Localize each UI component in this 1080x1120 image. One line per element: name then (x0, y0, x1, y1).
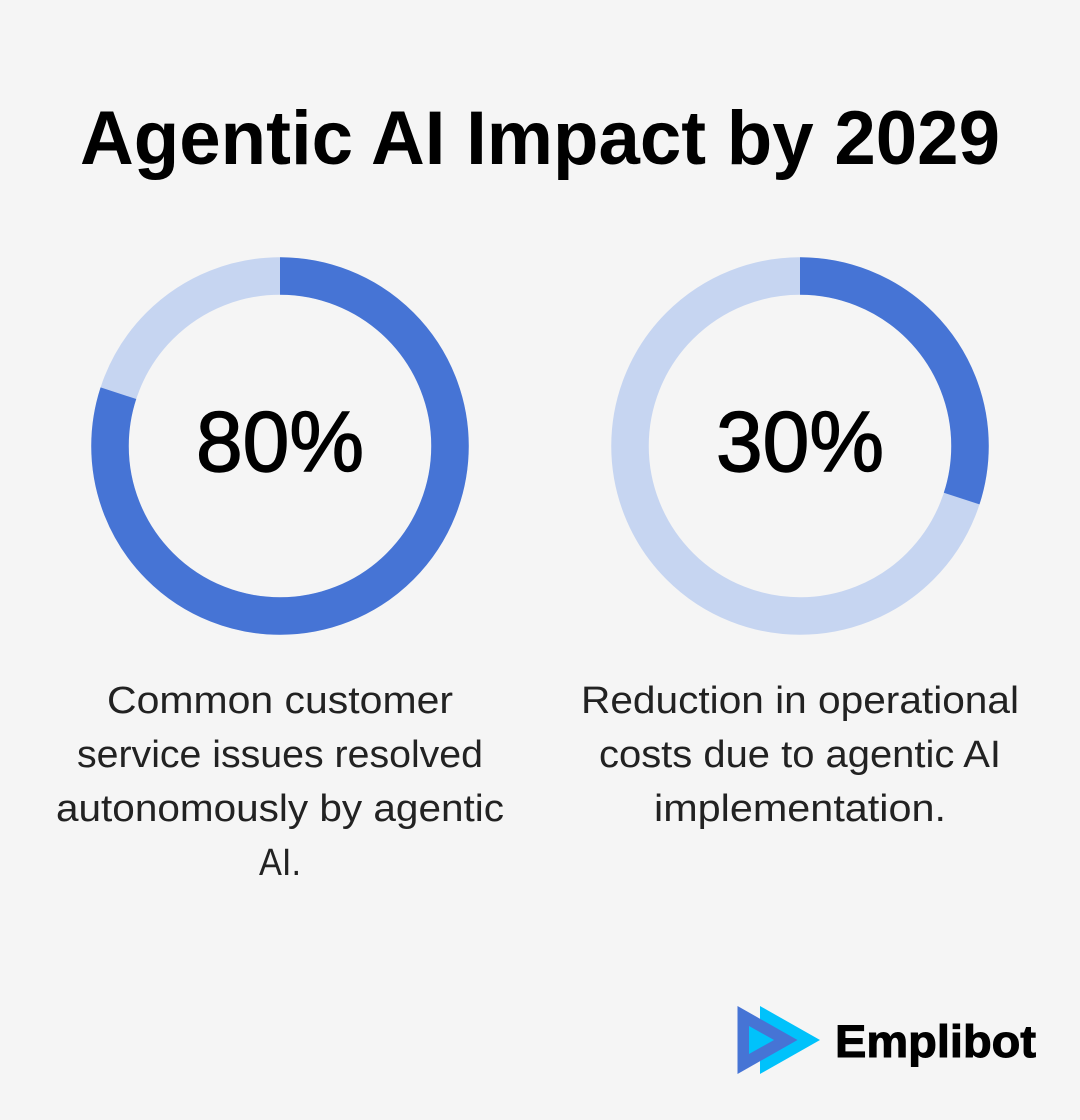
wordmark: Emplibot (835, 1016, 1036, 1067)
panel: 30% statistic (581, 276, 1019, 830)
donut chart: 30% (630, 276, 970, 616)
donut chart: 80% (110, 276, 450, 616)
description: customer service issues: AI. (259, 842, 301, 884)
icon: double play triangles (738, 1006, 820, 1074)
description: customer service issues: service issues resolved (77, 734, 483, 776)
description: operational costs: Reduction in operational (581, 680, 1019, 722)
value: 80%: 80% (196, 395, 364, 490)
description: customer service issues: autonomously by agentic (56, 788, 504, 830)
description: customer service issues (56, 680, 504, 884)
title: Agentic AI Impact by 2029 (80, 96, 1000, 181)
value: 30%: 30% (716, 395, 884, 490)
panel: 80% statistic (56, 276, 504, 884)
description: operational costs: costs due to agentic AI (599, 734, 1001, 776)
description: customer service issues: Common customer (107, 680, 453, 722)
logo: Emplibot (738, 1006, 1036, 1074)
description: operational costs (581, 680, 1019, 830)
description: operational costs: implementation. (654, 788, 946, 830)
